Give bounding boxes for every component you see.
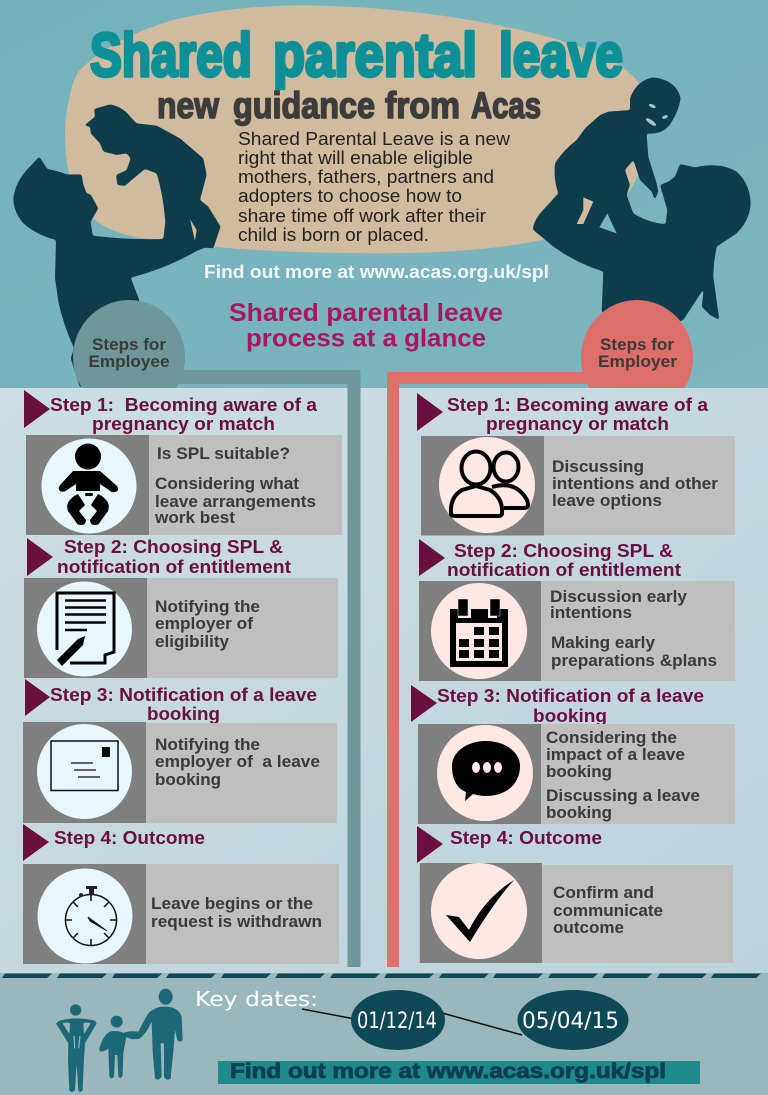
text [550, 588, 717, 670]
text [151, 895, 322, 931]
employer badge: Steps for [600, 335, 674, 354]
arrow [23, 824, 49, 861]
title: parental [273, 21, 477, 89]
employer step 3 [411, 685, 735, 824]
text [155, 598, 260, 651]
intro paragraph: child is born or placed. [238, 224, 429, 245]
text: Discussion early [550, 588, 688, 606]
text [155, 736, 320, 789]
text: preparations &plans [551, 652, 717, 670]
text: Leave begins or the [151, 895, 313, 913]
date oval 2 [518, 990, 628, 1050]
icon: family [56, 989, 183, 1092]
arrow [411, 685, 437, 722]
text [546, 729, 700, 822]
employee badge: Steps for [92, 335, 166, 354]
date connector lines [302, 1009, 522, 1035]
heading: pregnancy or match [92, 413, 275, 434]
header blob [65, 5, 648, 253]
silhouette: parent lifting baby, left [13, 104, 221, 388]
subtitle: from [385, 85, 460, 126]
arrow [417, 393, 443, 431]
employee connector, horizontal [178, 370, 360, 384]
heading [50, 684, 317, 724]
text: request is withdrawn [151, 913, 322, 931]
employee step 3 [23, 679, 337, 823]
text: Considering the [546, 729, 677, 747]
intro paragraph: Shared Parental Leave is a new [238, 128, 511, 149]
heading [437, 685, 704, 726]
subtitle [157, 85, 541, 126]
employee badge [73, 300, 185, 414]
heading: Step 2: Choosing SPL & [64, 536, 283, 557]
heading [50, 394, 318, 434]
employer badge [581, 300, 693, 415]
heading: pregnancy or match [486, 413, 669, 434]
text: employer of [155, 615, 254, 633]
card [419, 863, 733, 963]
date oval 1: 01/12/14 [357, 1009, 437, 1034]
text: Discussing a leave [546, 787, 700, 805]
employer step 4 [417, 826, 733, 963]
icon: two people [451, 452, 528, 516]
text: Notifying the [155, 598, 260, 616]
icon: stopwatch [66, 886, 117, 946]
employee badge: Employee [88, 352, 170, 371]
text: booking [546, 763, 612, 781]
title [90, 21, 623, 89]
employee step 1 [24, 390, 342, 535]
icon: speech bubble [452, 741, 520, 801]
text: impact of a leave [546, 746, 685, 764]
employer badge: Employer [598, 352, 677, 371]
text: leave options [552, 492, 662, 510]
card [418, 724, 735, 824]
employer connector, horizontal [387, 372, 600, 384]
process heading: process at a glance [246, 324, 486, 352]
date oval 1 [351, 990, 445, 1050]
dashed divider [2, 974, 761, 978]
card [26, 435, 342, 535]
card [421, 436, 735, 536]
baby face, right [645, 103, 668, 127]
icon: document and pencil [57, 593, 114, 666]
heading: Step 2: Choosing SPL & [454, 540, 673, 561]
subtitle: guidance [233, 85, 375, 126]
heading: Step 4: Outcome [450, 827, 602, 848]
employer step 1 [417, 393, 735, 536]
intro paragraph: right that will enable eligible [238, 147, 473, 168]
process heading: Shared parental leave [229, 299, 503, 327]
employee connector, vertical [348, 370, 360, 967]
arrow [27, 538, 53, 576]
intro paragraph: share time off work after their [238, 205, 486, 226]
silhouette: parent lifting baby, right [533, 77, 751, 337]
text: eligibility [155, 633, 230, 651]
icon: envelope [51, 741, 118, 790]
subtitle: new [157, 85, 219, 126]
text: employer of a leave [155, 753, 320, 771]
text: Confirm and [553, 884, 654, 902]
footer band [0, 973, 768, 1095]
text: Discussing [552, 458, 644, 476]
intro paragraph: adopters to choose how to [238, 185, 462, 206]
date oval 2: 05/04/15 [522, 1009, 619, 1034]
heading: Step 4: Outcome [54, 827, 205, 848]
heading: Step 3: Notification of a leave [50, 684, 317, 705]
heading: Step 3: Notification of a leave [437, 685, 704, 706]
arrow [417, 826, 443, 863]
text: communicate [553, 902, 663, 920]
text: booking [546, 804, 612, 822]
heading: booking [147, 703, 220, 724]
text: Considering what [155, 475, 300, 493]
employer step 2 [419, 539, 735, 681]
title: Shared [90, 21, 252, 89]
heading: notification of entitlement [57, 556, 291, 577]
text: work best [154, 509, 236, 527]
heading: Step 1: Becoming aware of a [447, 394, 709, 415]
text: leave arrangements [155, 493, 316, 511]
icon: baby [59, 444, 118, 525]
title: leave [499, 21, 623, 89]
heading [57, 536, 291, 577]
text [552, 458, 719, 510]
heading [447, 540, 681, 580]
text: Making early [551, 634, 656, 652]
heading: booking [533, 705, 607, 726]
card [24, 578, 338, 678]
text: booking [155, 771, 221, 789]
employee step 2 [24, 536, 338, 678]
card [419, 581, 735, 681]
text: Notifying the [155, 736, 260, 754]
leg gap, left baby [190, 219, 197, 241]
heading: Step 1: Becoming aware of a [50, 394, 318, 415]
text: outcome [553, 919, 624, 937]
steps panel background [0, 388, 768, 973]
subtitle: Acas [471, 85, 541, 126]
arrow [419, 539, 445, 576]
text: Is SPL suitable? [157, 445, 290, 463]
find out more link: Find out more at www.acas.org.uk/spl [204, 261, 549, 282]
card [23, 864, 339, 964]
process heading [229, 299, 503, 352]
icon: check mark [446, 880, 514, 942]
text: intentions and other [552, 475, 719, 493]
baby leg gaps, right [577, 197, 593, 224]
arrow [25, 679, 50, 716]
icon: calendar [450, 599, 508, 667]
intro paragraph: mothers, fathers, partners and [238, 166, 494, 187]
arrow [24, 390, 50, 428]
heading [447, 394, 709, 434]
text: intentions [550, 604, 632, 622]
intro paragraph [238, 128, 511, 245]
key dates label: Key dates: [195, 987, 318, 1011]
footer link bar: Find out more at www.acas.org.uk/spl [230, 1060, 666, 1083]
employee step 4 [23, 824, 339, 964]
heading: notification of entitlement [447, 559, 681, 580]
card [23, 722, 337, 823]
text [553, 884, 663, 937]
employer connector, vertical [387, 372, 399, 967]
text [154, 445, 316, 527]
